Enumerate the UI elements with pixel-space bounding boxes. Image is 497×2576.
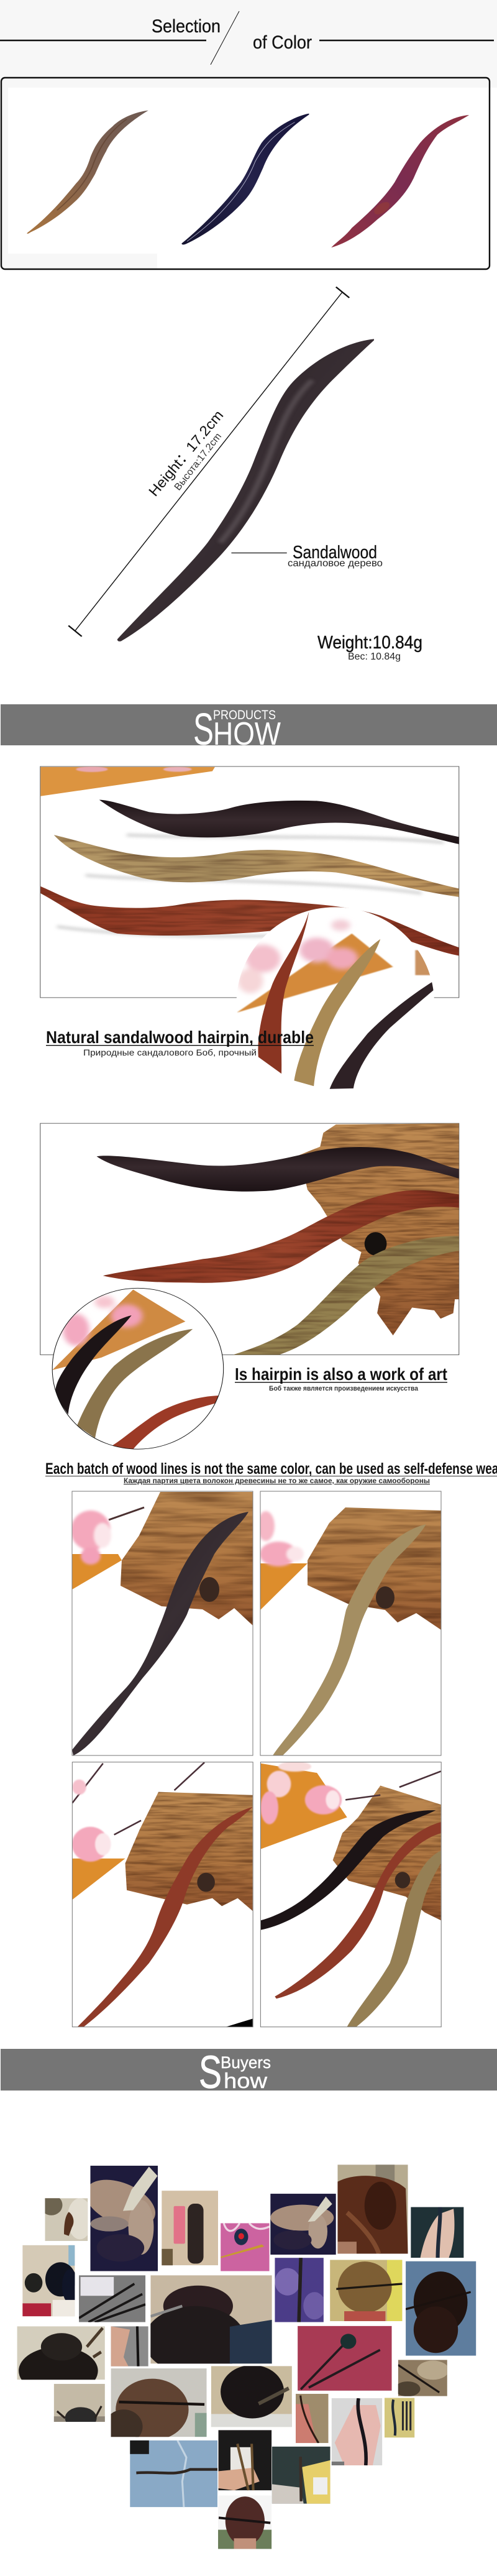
caption: work of art: Is hairpin is also a work of art <box>235 1364 447 1384</box>
inset circle: hairpin tips over flowers <box>237 907 434 1098</box>
photo: red hairpin <box>72 1762 253 2027</box>
blurred tray <box>237 934 393 1013</box>
material label: Sandalwood <box>293 543 377 563</box>
background: pale header band <box>0 0 497 88</box>
hairpin: crimson wood <box>331 115 469 247</box>
hairpin: red <box>103 1190 459 1283</box>
hairpin: large dark <box>117 339 374 642</box>
panel: three hairpins side view <box>40 766 459 998</box>
wood block <box>299 1123 459 1335</box>
heading: selection of color: of Color <box>253 32 312 53</box>
photo: three hairpins on wood <box>260 1762 441 2027</box>
photo: dark hair from behind <box>150 2275 272 2363</box>
collage: customer photos heart <box>17 2164 476 2549</box>
hairpin: dark navy <box>181 114 309 245</box>
photo: hand with fork <box>111 2326 148 2367</box>
height label russian: Высота:17.2cm <box>173 431 224 492</box>
banner: buyers show: S <box>199 2046 222 2098</box>
banner: products show: S <box>193 705 214 755</box>
banner: products show: PRODUCTS <box>213 708 276 722</box>
photo: dark pins with label <box>79 2275 145 2322</box>
photo: head with low bun <box>218 2495 271 2549</box>
banner: products show <box>1 704 497 745</box>
banner: products show: HOW <box>213 716 281 752</box>
photo: double buns in room <box>22 2245 75 2316</box>
hairpin: red <box>40 886 459 955</box>
photo: snake pin in hair <box>90 2166 158 2271</box>
heading: selection of color <box>0 11 494 65</box>
caption: work of art <box>235 1364 447 1392</box>
photo: hand on stripes <box>296 2394 329 2443</box>
banner: buyers show: Buyers <box>221 2053 271 2072</box>
shadows <box>57 835 444 936</box>
photo: blonde brown hair <box>330 2260 402 2321</box>
photo: brown bun <box>337 2164 408 2254</box>
caption: natural sandalwood: Natural sandalwood hairpin, durable <box>46 1028 314 1047</box>
photo: pin on jeans <box>130 2440 217 2507</box>
caption: natural sandalwood: Природные сандалового Боб, прочный <box>83 1047 257 1057</box>
photo: fork pins on yellow <box>385 2398 414 2437</box>
photo: antler pin parcel <box>272 2447 331 2504</box>
weight label: Weight:10.84g <box>317 633 422 653</box>
dimension line <box>68 287 349 637</box>
photo: hand with dark pin <box>411 2207 463 2258</box>
material label russian: сандаловое дерево <box>288 558 383 569</box>
photo: pins on crimson <box>298 2326 392 2391</box>
caption: work of art: Боб также является произведением искусства <box>269 1385 419 1392</box>
product diagram: sandalwood hairpin dimensions <box>68 287 422 662</box>
photo: snake pin small <box>270 2194 336 2255</box>
photo: head with antler <box>54 2384 105 2429</box>
photo: lipstick and fork pin <box>162 2191 218 2265</box>
hairpin: black <box>97 1147 459 1192</box>
wood tray corner <box>40 767 215 796</box>
photo: pin on fur <box>395 2360 449 2396</box>
photo: dark hair blue wall <box>406 2261 476 2356</box>
caption: natural sandalwood <box>46 1028 314 1057</box>
caption: each batch: Каждая партия цвета волокон древесины не то же самое, как оружие самообороны <box>124 1478 430 1485</box>
hairpin: tan <box>233 1236 459 1355</box>
photo: flower and gold pin on pink <box>221 2223 270 2271</box>
banner: buyers show: how <box>224 2069 267 2093</box>
photo: tulip pin on fur <box>45 2198 88 2241</box>
panel: hairpins on wood block <box>40 1123 459 1355</box>
weight label russian: Вес: 10.84g <box>348 651 401 662</box>
banner: buyers show <box>1 2046 497 2098</box>
photo: pin on purple <box>275 2258 324 2322</box>
panel: color swatches <box>1 78 490 269</box>
photo: dark bun with ornate pin <box>211 2365 292 2427</box>
photo: palm with S pin <box>332 2398 382 2465</box>
heading: selection of color: Selection <box>152 16 221 37</box>
photo: tan hairpin <box>257 1491 441 1755</box>
photo: antler pin in hair <box>17 2326 105 2394</box>
hairpin: brown wood <box>27 111 148 234</box>
photo: black hairpin <box>71 1491 253 1755</box>
photo: hand holding ornate pins <box>219 2430 271 2490</box>
hairpin: tan <box>54 835 459 897</box>
height label: Height：17.2cm <box>145 407 226 499</box>
inset circle: hairpin tips close-up <box>52 1288 224 1449</box>
hairpin: black <box>99 800 459 844</box>
photo: brown hair with stick <box>104 2368 207 2444</box>
